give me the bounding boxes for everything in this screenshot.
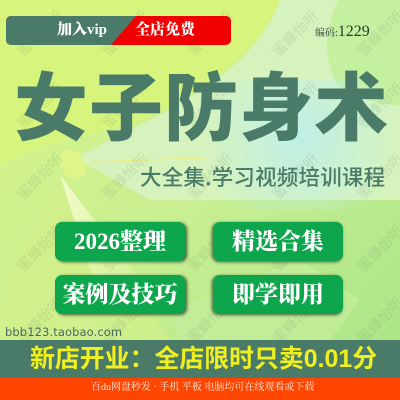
watermarks: 蜜蜂怡听 xyxy=(15,151,67,203)
watermarks: 蜜蜂怡听 xyxy=(185,80,237,132)
button: cases: 案例及技巧 xyxy=(62,282,178,307)
label: join vip: 加入vip xyxy=(57,22,107,38)
watermarks: 蜜蜂怡听 xyxy=(100,151,152,203)
watermarks: 蜜蜂怡听 xyxy=(15,223,67,275)
promo band xyxy=(0,340,400,378)
watermarks: 蜜蜂怡听 xyxy=(270,8,322,60)
watermarks: 蜜蜂怡听 xyxy=(270,223,322,275)
watermarks: 蜜蜂怡听 xyxy=(100,295,152,347)
button: instant xyxy=(213,275,343,314)
watermarks: 蜜蜂怡听 xyxy=(185,223,237,275)
promo text: 新店开业：全店限时只卖0.01分 xyxy=(30,345,377,373)
title: 女子防身术 xyxy=(14,49,389,156)
watermarks: 蜜蜂怡听 xyxy=(15,80,67,132)
delivery band xyxy=(0,378,400,400)
watermarks: 蜜蜂怡听 xyxy=(270,80,322,132)
watermarks: 蜜蜂怡听 xyxy=(15,295,67,347)
watermarks: 蜜蜂怡听 xyxy=(270,151,322,203)
watermarks: 蜜蜂怡听 xyxy=(100,80,152,132)
watermarks: 蜜蜂怡听 xyxy=(100,8,152,60)
watermarks: 蜜蜂怡听 xyxy=(185,8,237,60)
badge: join vip xyxy=(6,16,136,45)
watermarks: 蜜蜂怡听 xyxy=(270,295,322,347)
label: store free: 全店免费 xyxy=(135,22,195,38)
watermarks: 蜜蜂怡听 xyxy=(185,151,237,203)
button: selected xyxy=(213,222,343,261)
button: 2026: 2026整理 xyxy=(74,229,166,254)
button: cases xyxy=(55,275,185,314)
button: selected: 精选合集 xyxy=(232,229,324,254)
watermarks: 蜜蜂怡听 xyxy=(185,295,237,347)
product code: 编码:1229 xyxy=(315,23,370,40)
button: instant: 即学即用 xyxy=(232,282,324,307)
watermarks: 蜜蜂怡听 xyxy=(15,8,67,60)
watermarks: 蜜蜂怡听 xyxy=(100,223,152,275)
subtitle: 大全集.学习视频培训课程 xyxy=(140,161,385,192)
delivery text: 百du网盘秒发 · 手机 平板 电脑均可在线观看或下载 xyxy=(91,382,314,393)
badge: vip and free xyxy=(6,16,231,45)
shop url: bbb123.taobao.com xyxy=(5,325,122,339)
button: 2026 xyxy=(55,222,185,261)
